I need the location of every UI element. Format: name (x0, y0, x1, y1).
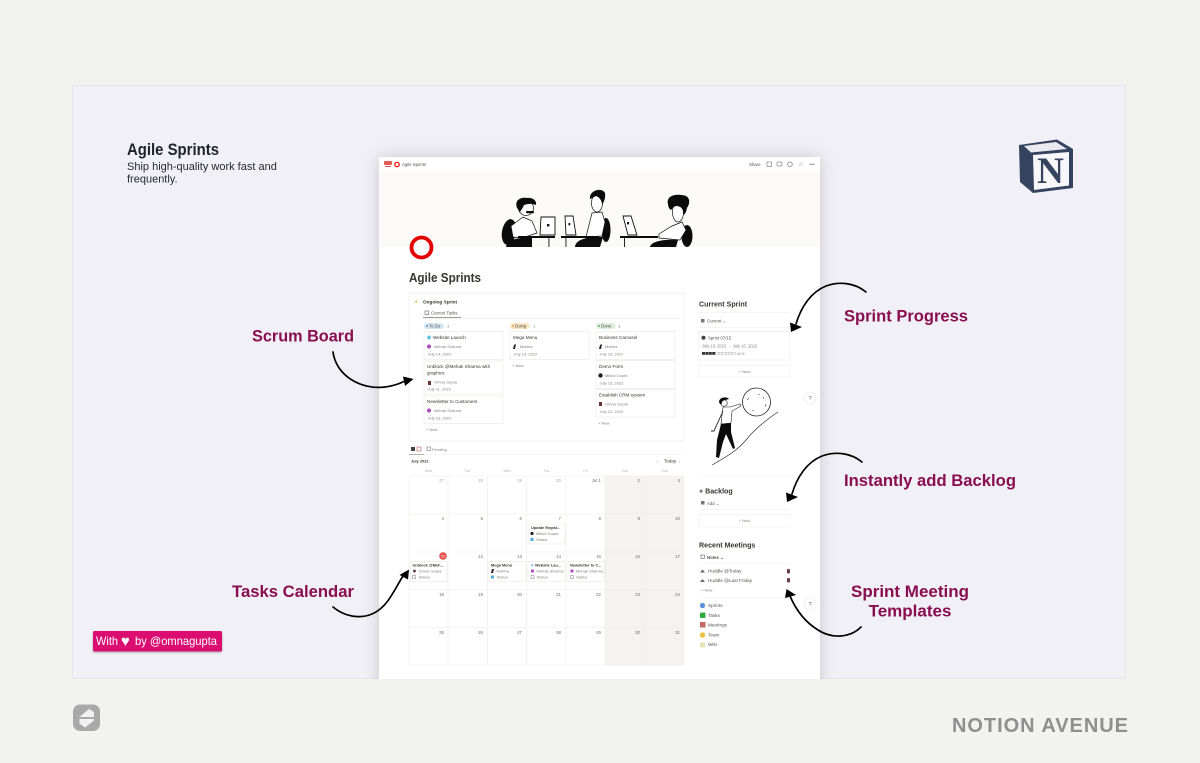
icon: help button (804, 392, 816, 404)
weekday headers: Fri (583, 469, 588, 473)
page top bar: ••• (809, 162, 815, 168)
label: tasks calendar: Tasks Calendar (232, 582, 354, 601)
calendar dates: 5 (481, 516, 484, 521)
credit badge: With (96, 635, 118, 648)
calendar tabs (409, 447, 684, 455)
person one (500, 198, 555, 247)
title: Agile Sprints (127, 141, 219, 159)
card: crm (596, 390, 675, 417)
calendar card: update registration (529, 524, 565, 544)
panel: recent meetings: Recent Meetings (699, 542, 755, 550)
card: crm: Establish CRM system (599, 392, 645, 398)
calendar card: mega menu (489, 562, 526, 582)
card: unblock (424, 361, 503, 394)
panel: current sprint (699, 300, 790, 377)
card: demo form: Demo Form (599, 364, 623, 369)
calendar dates: 12 (478, 554, 484, 559)
calendar dates: 28 (478, 478, 484, 483)
panel: ongoing sprint board: Ongoing Sprint (423, 300, 458, 304)
arrow: instantly add backlog (786, 453, 862, 502)
calendar card: update registration: Milind Gupta (536, 531, 559, 536)
calendar dates: 23 (635, 592, 641, 597)
panel: recent meetings: + New (701, 588, 713, 592)
calendar dates: 26 (478, 630, 484, 635)
calendar dates: 28 (556, 630, 562, 635)
panel: current sprint: Current ⌄ (707, 318, 726, 324)
calendar dates: 17 (675, 554, 681, 559)
brand wordmark: NOTION AVENUE (952, 715, 1128, 737)
calendar dates: 3 (678, 478, 681, 483)
calendar dates: Jul 1 (592, 478, 602, 483)
calendar card: newsletter: Mehak Sharma (576, 568, 604, 574)
column: doing (510, 323, 589, 368)
panel: backlog: Add ⌄ (707, 501, 719, 506)
calendar dates: 31 (675, 630, 681, 635)
column: done (596, 323, 675, 426)
weekday headers: Thu (543, 469, 550, 473)
calendar dates: 30 (556, 478, 562, 483)
card: unblock: July 11, 2022 (428, 386, 452, 392)
weekday headers: Sun (661, 469, 668, 473)
arrow: tasks calendar (333, 570, 409, 617)
column: doing: + New (512, 363, 524, 368)
calendar dates: 22 (596, 592, 602, 597)
calendar card: unblock (410, 562, 447, 582)
panel: recent meetings: Huddle @Today (708, 568, 742, 574)
calendar dates: 9 (638, 516, 641, 521)
page top bar: Agile Sprints (402, 162, 426, 167)
column: done: Done (601, 324, 612, 329)
calendar card: unblock: Status (418, 574, 430, 580)
heading block (127, 141, 277, 186)
card: website launch: Website Launch (433, 335, 466, 340)
panel: recent meetings: Notes ⌄ (707, 555, 724, 560)
column: to do: 3 (447, 324, 450, 329)
column: to do: + New (426, 427, 438, 432)
weekday headers: Sat (622, 469, 628, 473)
calendar card: mega menu: Martha (496, 568, 510, 574)
panel: ongoing sprint board: ✦ (414, 300, 418, 306)
card: sprint 07/15: 41% (736, 351, 745, 356)
column: to do (424, 323, 503, 432)
calendar dates: 11 (441, 554, 446, 558)
calendar dates: 30 (635, 630, 641, 635)
panel: tasks calendar (409, 447, 684, 665)
calendar dates: 8 (599, 516, 602, 521)
page links list: Meetings (708, 622, 728, 628)
card: business carousel: Business Carousel (599, 335, 637, 340)
label: scrum board: Scrum Board (252, 326, 354, 346)
card: website launch: July 14, 2022 (428, 352, 452, 356)
weekday headers: Tue (464, 469, 471, 473)
credit badge: ♥ (121, 633, 130, 650)
card: newsletter: Mehak Sharma (434, 408, 462, 413)
card: demo form: Milind Gupta (605, 373, 628, 378)
column: doing: 1 (533, 324, 536, 329)
label: sprint progress: Sprint Progress (844, 307, 968, 326)
calendar dates: 29 (596, 630, 602, 635)
icon: help button (804, 598, 816, 610)
page links list: Team (708, 632, 720, 638)
calendar card: update registration: Status (536, 537, 547, 542)
card: newsletter: Newsletter to Customers (427, 399, 478, 404)
card: unblock: graphics (427, 370, 445, 375)
calendar dates: 6 (520, 516, 523, 521)
card: newsletter: July 15, 2022 (428, 416, 452, 420)
calendar dates: 20 (517, 592, 523, 597)
page top bar (384, 160, 815, 168)
weekday headers: Wed (503, 469, 511, 473)
panel: backlog: + Backlog (699, 488, 733, 496)
calendar card: website launch (528, 562, 565, 582)
calendar card: update registration: Update Regist... (531, 525, 560, 530)
calendar dates: 25 (439, 630, 445, 635)
panel: current sprint: Current Sprint (699, 300, 748, 308)
card: crm: July 12, 2022 (600, 409, 624, 414)
card: website launch (424, 332, 503, 360)
person two (561, 190, 610, 247)
panel: notion page screenshot (379, 157, 820, 697)
card: business carousel: July 15, 2022 (600, 352, 624, 356)
calendar dates: 14 (556, 554, 562, 559)
panel: backlog: + New (739, 518, 750, 523)
card: demo form (596, 360, 675, 388)
calendar card: mega menu: Status (496, 574, 508, 580)
panel: tasks calendar: ‹ (657, 459, 659, 464)
panel: ongoing sprint board: Current Tasks (431, 310, 457, 316)
illustration: three people at laptops (500, 190, 692, 247)
label: instantly add backlog: Instantly add Backlog (844, 471, 1016, 490)
person three (620, 195, 692, 247)
page links list: Wiki (708, 642, 717, 647)
card: newsletter (424, 396, 503, 424)
calendar dates: 27 (517, 630, 523, 635)
arrow: scrum board (333, 352, 414, 387)
page top bar: Share (749, 162, 761, 167)
card: unblock: Omna Gupta (434, 379, 458, 384)
label: sprint meeting templates: Templates (869, 602, 951, 620)
cover banner (379, 172, 820, 247)
page title: Agile Sprints (409, 271, 481, 285)
calendar dates: 27 (439, 478, 445, 483)
calendar card: unblock: Unblock @Meh... (412, 562, 444, 568)
calendar card: website launch: Status (536, 574, 548, 580)
weekday headers: Mon (425, 469, 432, 473)
calendar tabs: Pending (432, 447, 447, 452)
calendar dates: 18 (439, 592, 445, 597)
calendar dates: 10 (675, 516, 681, 521)
calendar dates: 29 (517, 478, 523, 483)
card: mega menu (510, 332, 589, 360)
calendar dates: 2 (638, 478, 641, 483)
card: sprint 07/15: July 10, 2022 → July 16, 2022 (702, 344, 758, 348)
card: sprint 07/15: Sprint 07/15 (708, 335, 732, 340)
panel: tasks calendar: Today (664, 458, 677, 464)
calendar card: mega menu: Mega Menu (491, 562, 513, 568)
panel: recent meetings (699, 542, 790, 598)
calendar dates: 7 (559, 516, 562, 521)
icon: help button: ? (808, 602, 812, 608)
card: business carousel (596, 332, 675, 360)
credit badge (93, 631, 222, 652)
column: to do: To Do (429, 324, 441, 329)
panel: tasks calendar: › (679, 459, 681, 464)
column: doing: Doing (515, 324, 527, 329)
calendar card: website launch: Website Lau... (535, 562, 561, 568)
calendar dates: 21 (556, 592, 562, 597)
calendar dates: 24 (675, 592, 681, 597)
card: business carousel: Martha (605, 344, 618, 349)
card: crm: Omna Gupta (605, 402, 629, 406)
page links list: Sprints (708, 603, 723, 608)
icon: help button: ? (808, 396, 812, 402)
calendar dates: 16 (635, 554, 641, 559)
background panel (72, 86, 1126, 678)
illustration: person pushing boulder (711, 388, 778, 465)
calendar dates: 19 (478, 592, 484, 597)
panel: current sprint: + New (739, 369, 750, 374)
column: done: 3 (618, 324, 621, 329)
card: demo form: July 15, 2022 (600, 380, 624, 386)
calendar card: website launch: Mehak Sharma (536, 568, 564, 574)
calendar dates: 13 (517, 554, 523, 559)
card: mega menu: Mega Menu (513, 335, 538, 340)
calendar card: newsletter (568, 562, 604, 582)
credit badge: by @omnagupta (135, 635, 218, 648)
icon: red ring (412, 238, 432, 258)
arrow: sprint progress (790, 283, 866, 332)
weekday headers (425, 469, 668, 473)
calendar dates (439, 478, 681, 635)
subtitle: frequently. (127, 174, 178, 186)
panel: ongoing sprint board (409, 293, 684, 441)
panel: recent meetings: Huddle @Last Friday (708, 578, 753, 583)
label: sprint meeting templates: Sprint Meeting (851, 582, 969, 601)
column: done: + New (598, 420, 610, 426)
page top bar: ☆ (798, 160, 804, 168)
calendar card: newsletter: Newsletter to C... (570, 562, 602, 568)
card: mega menu: Martha (520, 344, 533, 349)
card: website launch: Mehak Sharma (434, 344, 462, 349)
icon: notion logo (1019, 140, 1073, 193)
subtitle: Ship high-quality work fast and (127, 161, 277, 173)
page links list: Tasks (708, 613, 721, 618)
panel: backlog (699, 488, 790, 527)
page links list (700, 603, 728, 648)
card: unblock: Unblock @Mehak Sharma with (427, 364, 491, 369)
arrow: sprint meeting templates (785, 589, 861, 636)
calendar card: unblock: Omna Gupta (418, 568, 442, 574)
calendar dates: 4 (442, 516, 445, 521)
panel: tasks calendar: July 2022 (411, 458, 429, 464)
icon: notion logo: N (1037, 151, 1064, 192)
calendar dates: 15 (596, 554, 602, 559)
card: mega menu: July 13, 2022 (514, 352, 538, 356)
calendar card: newsletter: Status (576, 574, 587, 580)
icon: notion avenue logo (73, 704, 100, 731)
card: sprint 07/15 (699, 332, 790, 360)
